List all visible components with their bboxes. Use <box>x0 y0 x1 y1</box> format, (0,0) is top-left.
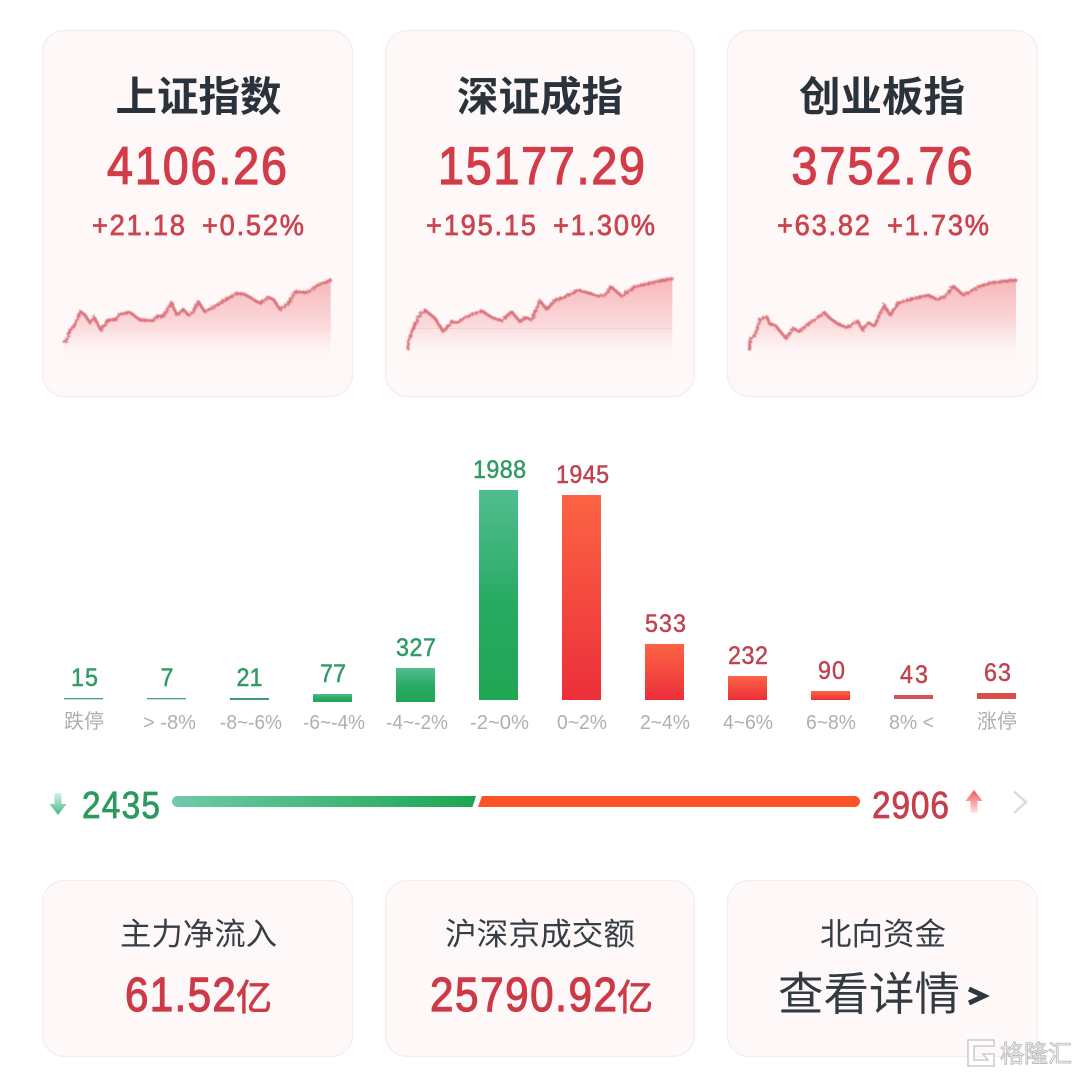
panel: 主力净流入 <box>42 880 352 1056</box>
bar: 涨停: 涨停 <box>977 710 1017 733</box>
unit: 亿 <box>617 977 653 1018</box>
summary: 涨跌家数 <box>50 784 1026 826</box>
bar: decliners <box>172 796 476 807</box>
bar: > -8%: 7 <box>161 664 173 692</box>
icon: chevron <box>969 989 984 1003</box>
bar: -6~-4%: 77 <box>320 660 346 688</box>
bar: -4~-2%: 327 <box>396 634 436 662</box>
bar: 6~8%: 90 <box>818 657 845 685</box>
bar: 2~4% <box>640 610 690 734</box>
bar: 涨停: 63 <box>984 659 1011 687</box>
bar: -8~-6%: 21 <box>236 664 263 692</box>
bar: 2~4%: 2~4% <box>640 712 690 734</box>
change values: +1.73% <box>887 209 989 241</box>
bar: 跌停: 15 <box>71 664 98 692</box>
bar: -2~0% <box>470 456 529 734</box>
heading: 创业板指: 创业板指 <box>799 74 965 120</box>
bar: advancers <box>478 796 860 807</box>
bar: 跌停 <box>64 664 104 733</box>
bar: 8% <: 43 <box>900 661 928 689</box>
value: 61.52 <box>125 967 236 1022</box>
bar: 0~2%: 0~2% <box>557 712 607 734</box>
bar: -2~0%: 1988 <box>473 456 526 484</box>
bar: 6~8% <box>806 657 856 734</box>
heading: 上证指数: 上证指数 <box>116 74 282 120</box>
label: 沪深京成交额 <box>445 917 635 952</box>
index value: 15177.29 <box>438 136 645 196</box>
bar: 8% < <box>889 661 934 734</box>
sparkline chart <box>749 280 1016 363</box>
panel: 北向资金 <box>728 880 1038 1056</box>
change values <box>92 209 304 241</box>
sparkline chart <box>408 278 672 363</box>
change values: +1.30% <box>553 209 655 241</box>
advance count: 2906 <box>872 784 949 826</box>
bar: 4~6%: 4~6% <box>723 712 773 734</box>
watermark <box>968 1040 1072 1068</box>
label: 主力净流入 <box>120 917 277 952</box>
bar: > -8% <box>143 664 196 734</box>
change values <box>426 209 655 241</box>
change values <box>777 209 989 241</box>
bar: > -8%: > -8% <box>143 712 196 734</box>
decline count: 2435 <box>82 784 160 826</box>
change values: +195.15 <box>426 209 536 241</box>
index value: 4106.26 <box>107 136 287 196</box>
bar: 6~8%: 6~8% <box>806 712 856 734</box>
bar chart: 涨跌分布 <box>64 456 1017 734</box>
panel: 创业板指 <box>728 30 1038 396</box>
panel: 沪深京成交额 <box>386 880 694 1056</box>
icon: logo <box>968 1040 994 1066</box>
value: 25790.92 <box>430 967 617 1022</box>
icon: chevron <box>1014 792 1026 813</box>
bar: -2~0%: -2~0% <box>470 712 529 734</box>
panel: 上证指数 <box>42 30 352 396</box>
bar: -4~-2%: -4~-2% <box>386 712 448 734</box>
label: 北向资金 <box>820 917 946 952</box>
bar: 涨停 <box>977 659 1017 733</box>
bar: -4~-2% <box>386 634 448 734</box>
sparkline chart <box>64 280 331 365</box>
link text: 查看详情 <box>778 969 960 1020</box>
bar: 2~4%: 533 <box>645 610 686 638</box>
bar: 8% <: 8% < <box>889 712 934 734</box>
unit: 亿 <box>236 977 272 1018</box>
change values: +0.52% <box>202 209 304 241</box>
bar: -6~-4%: -6~-4% <box>303 712 365 734</box>
icon: up arrow <box>966 790 982 813</box>
bar: -8~-6%: -8~-6% <box>220 712 282 734</box>
bar: 4~6% <box>723 642 773 734</box>
bar: 跌停: 跌停 <box>64 710 104 733</box>
bar: 0~2% <box>556 461 609 734</box>
heading: 深证成指: 深证成指 <box>457 74 623 120</box>
change values: +63.82 <box>777 209 870 241</box>
bar: -8~-6% <box>220 664 282 734</box>
bar: -6~-4% <box>303 660 365 734</box>
index value: 3752.76 <box>791 136 973 196</box>
change values: +21.18 <box>92 209 185 241</box>
bar: 4~6%: 232 <box>728 642 768 670</box>
panel: 深证成指 <box>386 30 694 396</box>
bar: 0~2%: 1945 <box>556 461 609 489</box>
watermark text: 格隆汇 <box>1000 1041 1072 1068</box>
icon: down arrow <box>50 793 66 815</box>
